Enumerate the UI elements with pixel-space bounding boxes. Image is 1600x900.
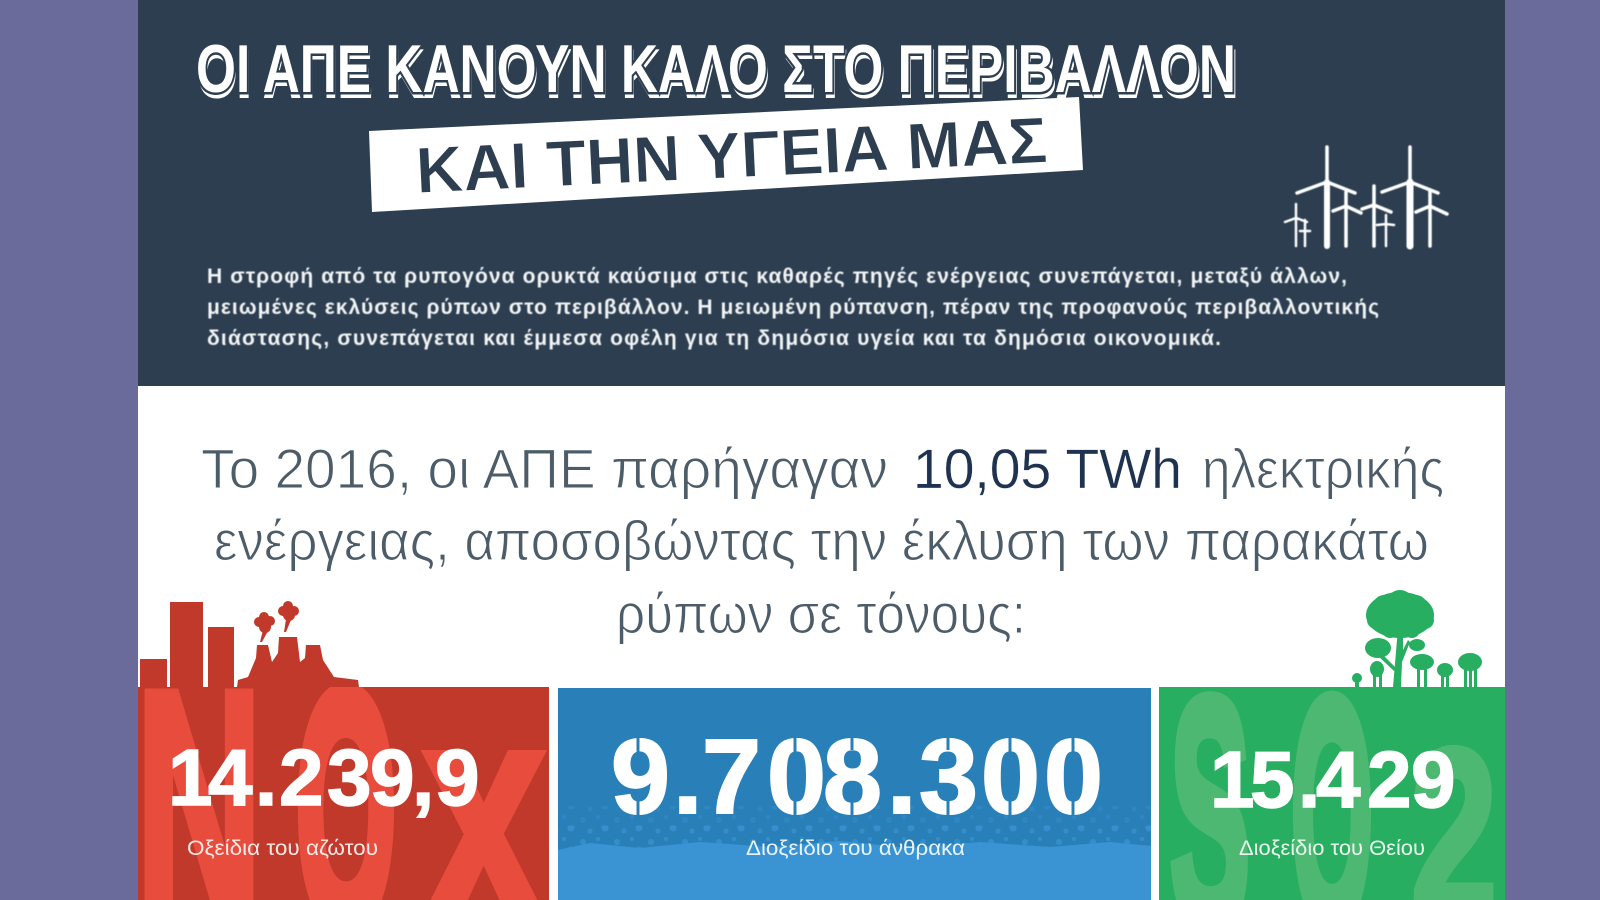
value: 9.708.300 bbox=[611, 718, 1103, 836]
main statement: ρύπων σε τόνους: bbox=[616, 582, 1026, 645]
strip text: ΚΑΙ ΤΗΝ ΥΓΕΙΑ ΜΑΣ bbox=[414, 103, 1049, 207]
watermark: NOx bbox=[136, 622, 548, 900]
icon: factory skyline bbox=[140, 601, 359, 687]
value: 15.429 bbox=[1210, 735, 1456, 824]
title shadow: ΟΙ ΑΠΕ ΚΑΝΟΥΝ ΚΑΛΟ ΣΤΟ ΠΕΡΙΒΑΛΛΟΝ bbox=[197, 36, 1238, 112]
intro paragraph: διάστασης, συνεπάγεται και έμμεσα οφέλη για τη δημόσια υγεία και τα δημόσια οικονομικά. bbox=[207, 327, 1221, 350]
panel: CO2 bbox=[558, 688, 1151, 900]
main statement: 10,05 TWh bbox=[913, 437, 1182, 500]
main statement: ενέργειας, αποσοβώντας την έκλυση των παρακάτω bbox=[214, 509, 1429, 572]
panel: header bbox=[138, 0, 1505, 386]
intro paragraph bbox=[207, 265, 1379, 350]
main statement: ηλεκτρικής bbox=[1202, 437, 1444, 500]
icon: wind turbines bbox=[1285, 147, 1447, 246]
main statement bbox=[201, 437, 1444, 645]
white page panel bbox=[138, 386, 1505, 900]
main statement: Το 2016, οι ΑΠΕ παρήγαγαν bbox=[201, 437, 888, 500]
label: Διοξείδιο του Θείου bbox=[1239, 837, 1425, 860]
title: ΟΙ ΑΠΕ ΚΑΝΟΥΝ ΚΑΛΟ ΣΤΟ ΠΕΡΙΒΑΛΛΟΝ bbox=[196, 31, 1236, 107]
icon: trees bbox=[1352, 590, 1482, 687]
value: 14.239,9 bbox=[168, 733, 480, 822]
watermark: SO2 bbox=[1170, 631, 1497, 900]
panel: NOx bbox=[136, 622, 549, 900]
title strip bbox=[369, 97, 1083, 212]
stencil gaps bbox=[638, 734, 1073, 816]
panel: SO2 bbox=[1159, 631, 1505, 900]
label: Διοξείδιο του άνθρακα bbox=[746, 837, 965, 860]
label: Οξείδια του αζώτου bbox=[187, 837, 378, 860]
speckled band bbox=[558, 806, 1151, 828]
intro paragraph: Η στροφή από τα ρυπογόνα ορυκτά καύσιμα στις καθαρές πηγές ενέργειας συνεπάγεται, μεταξύ άλλων, bbox=[207, 265, 1347, 288]
intro paragraph: μειωμένες εκλύσεις ρύπων στο περιβάλλον. Η μειωμένη ρύπανση, πέραν της προφανούς περιβαλλοντικής bbox=[207, 296, 1379, 319]
